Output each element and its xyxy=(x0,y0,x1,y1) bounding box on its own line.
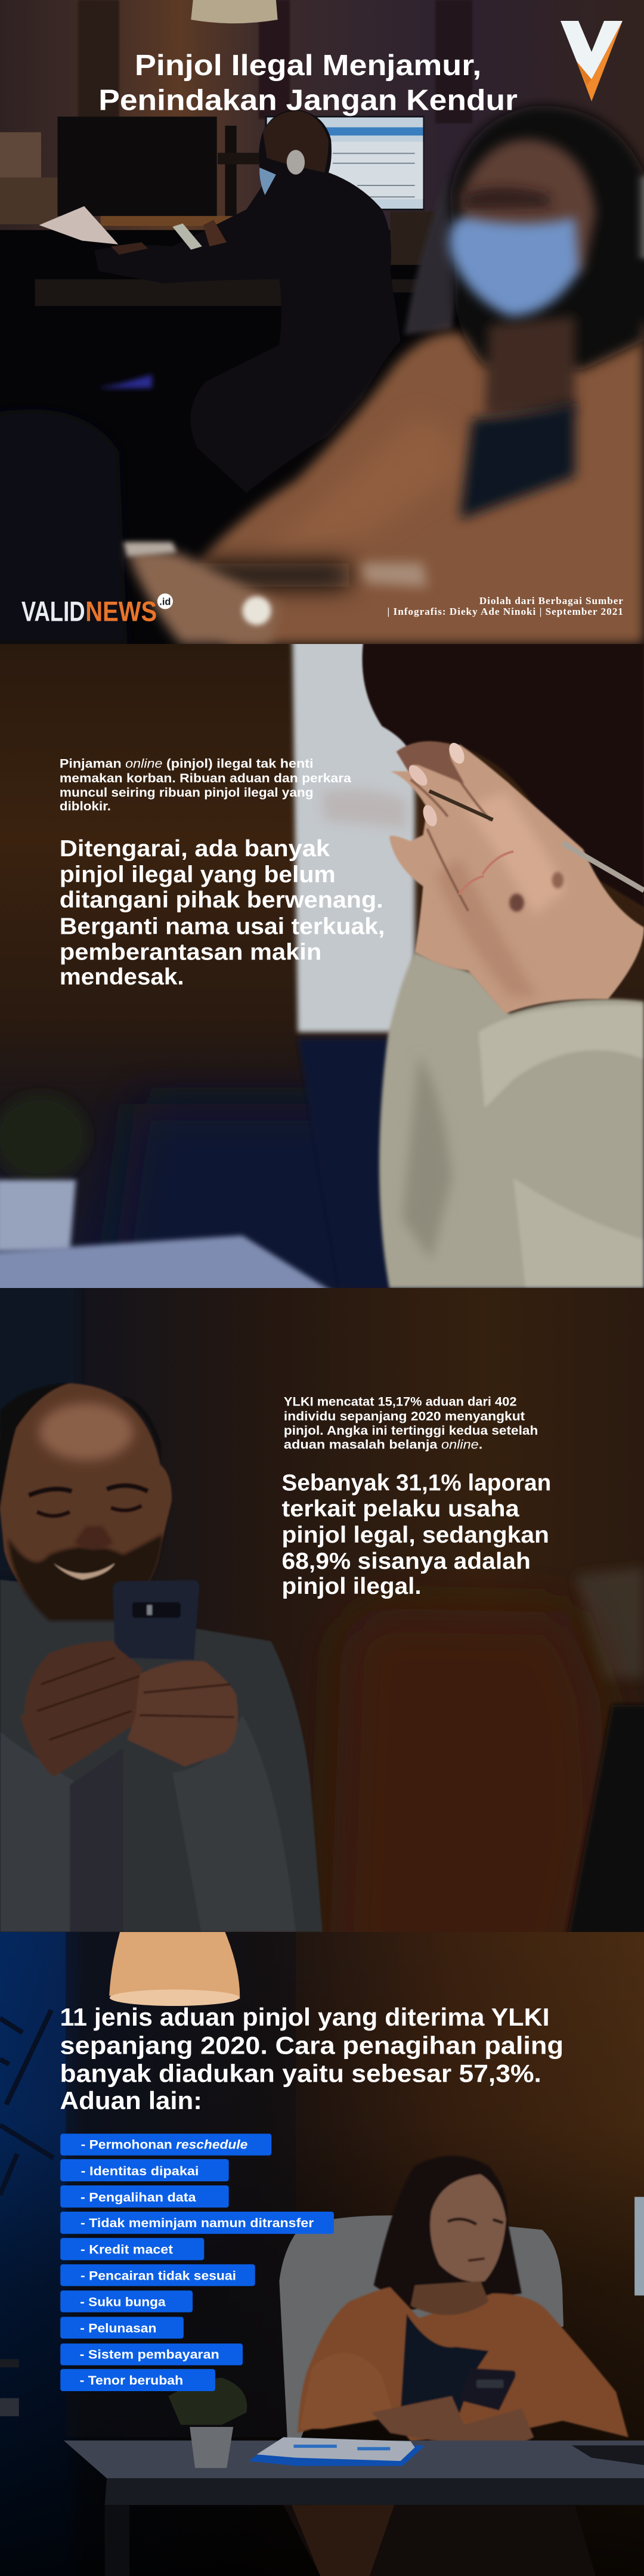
pen xyxy=(429,791,644,890)
hair side xyxy=(0,1383,70,1534)
beard xyxy=(8,1534,162,1621)
label: Kredit macet xyxy=(60,2238,204,2260)
forehead xyxy=(397,741,509,809)
YLKI text xyxy=(284,1395,538,1451)
ceiling lamp xyxy=(191,0,278,23)
desk surface glow xyxy=(101,216,256,226)
blurred shadow between hands xyxy=(193,563,349,587)
YLKI text: aduan masalah belanja online. xyxy=(284,1437,482,1451)
label: Tenor berubah xyxy=(60,2369,215,2391)
hair xyxy=(363,640,644,907)
nails xyxy=(446,741,467,766)
hair xyxy=(374,2156,522,2310)
label: Pengalihan data: - Pengalihan data xyxy=(80,2190,196,2205)
logo: Validnews.id: .id xyxy=(159,596,171,608)
blurred bright window xyxy=(292,636,415,1032)
office chair xyxy=(279,2215,564,2441)
finger creases xyxy=(411,763,491,911)
label: Identitas dipakai: - Identitas dipakai xyxy=(81,2164,199,2178)
heading: Aduan lain: xyxy=(60,2087,202,2114)
source credit xyxy=(388,595,623,617)
heading: 11 jenis aduan pinjol yang diterima YLKI xyxy=(60,2004,550,2031)
ceiling lamp xyxy=(109,1932,240,2006)
key statement xyxy=(282,1470,551,1599)
title: Pinjol Ilegal Menjamur, xyxy=(135,48,481,82)
panel: cover xyxy=(0,0,644,644)
hand xyxy=(203,219,227,246)
chair back xyxy=(404,175,464,335)
blurred orange figure xyxy=(329,1608,608,1986)
label: Identitas dipakai xyxy=(60,2159,229,2181)
title xyxy=(98,48,518,117)
shelves xyxy=(0,1932,644,2437)
blurred plant pot xyxy=(0,1180,76,1252)
sheet of paper xyxy=(39,206,118,244)
inner top xyxy=(460,402,575,519)
foreground woman xyxy=(181,106,644,644)
label: Pelunasan xyxy=(60,2317,184,2339)
logo: Validnews.id: NEWS xyxy=(85,596,157,627)
label: Pengalihan data xyxy=(60,2185,229,2207)
key statement: pinjol legal, sedangkan xyxy=(282,1522,549,1548)
YLKI text: YLKI mencatat 15,17% aduan dari 402 xyxy=(284,1395,517,1409)
list of complaint labels xyxy=(60,2134,334,2391)
intro text: muncul seiring ribuan pinjol ilegal yang xyxy=(60,785,314,800)
dark top xyxy=(401,2314,489,2413)
logo: Validnews.id: VALID xyxy=(21,596,85,627)
monitor stand xyxy=(225,126,237,241)
neck and chest xyxy=(485,316,575,415)
key statement: pemberantasan makin xyxy=(60,940,321,965)
clipboard with charts xyxy=(249,2437,425,2466)
face xyxy=(430,2174,506,2282)
nose shade xyxy=(74,1526,113,1550)
label: Tenor berubah: - Tenor berubah xyxy=(80,2373,183,2388)
label: Permohonan reschedule xyxy=(60,2134,271,2156)
neck xyxy=(411,2281,489,2315)
phone xyxy=(459,2368,516,2410)
key statement: pinjol ilegal. xyxy=(282,1574,422,1599)
key statement: Ditengarai, ada banyak xyxy=(60,836,330,862)
label: Tidak meminjam namun ditransfer xyxy=(60,2212,334,2234)
label: Permohonan reschedule: - Permohonan reschedule xyxy=(81,2138,247,2152)
blurred hands xyxy=(123,542,427,644)
jacket xyxy=(298,2287,628,2441)
key statement: terkait pelaku usaha xyxy=(282,1496,519,1522)
blue glow under the desk xyxy=(98,374,152,388)
rings xyxy=(482,852,513,874)
hair xyxy=(450,106,644,370)
logo: V mark xyxy=(561,21,623,101)
knuckle marks xyxy=(509,894,524,912)
label: Sistem pembayaran xyxy=(60,2343,243,2366)
intro text: Pinjaman online (pinjol) ilegal tak henti xyxy=(60,756,314,770)
panel: background and intro xyxy=(0,644,644,1288)
head xyxy=(0,1383,172,1617)
intro text: diblokir. xyxy=(60,799,111,813)
key statement: mendesak. xyxy=(60,964,184,990)
eyes and brows xyxy=(29,1485,148,1496)
laptop xyxy=(572,2445,644,2465)
face mask xyxy=(259,168,276,195)
label: Pencairan tidak sesuai: - Pencairan tidak sesuai xyxy=(80,2268,236,2283)
shirt xyxy=(0,1580,323,1932)
left monitor xyxy=(57,117,217,216)
blurred dark wall below window xyxy=(298,1038,411,1288)
blurred plant xyxy=(0,1094,88,1180)
man silhouette xyxy=(94,110,401,493)
wall pillars xyxy=(78,0,472,123)
key statement xyxy=(60,836,385,990)
blurred wall and window xyxy=(0,1280,644,1678)
YLKI text: individu sepanjang 2020 menyangkut xyxy=(284,1409,525,1423)
hands xyxy=(20,1641,144,1777)
jacket xyxy=(181,324,644,644)
key statement: 68,9% sisanya adalah xyxy=(282,1549,531,1574)
intro text xyxy=(60,756,351,813)
key statement: Berganti nama usai terkuak, xyxy=(60,914,385,939)
table xyxy=(64,2441,644,2576)
blurred laptop foreground xyxy=(0,410,128,644)
label: Suku bunga xyxy=(60,2290,193,2312)
boxes on the shelf xyxy=(0,132,58,224)
window frames xyxy=(0,2010,54,2195)
source credit: | Infografis: Dieky Ade Ninoki | September 2021 xyxy=(388,606,623,617)
label: Pencairan tidak sesuai xyxy=(60,2264,255,2286)
key statement: pinjol ilegal yang belum xyxy=(60,862,336,887)
dark blue lower wall xyxy=(107,1104,431,1318)
phone xyxy=(172,224,202,250)
woman xyxy=(298,2156,628,2450)
chair edge right xyxy=(630,177,644,259)
sleeve xyxy=(379,952,644,1288)
heading xyxy=(60,2004,564,2114)
potted plant xyxy=(168,2377,247,2468)
intro text: memakan korban. Ribuan aduan dan perkara xyxy=(60,771,351,785)
panel: YLKI data xyxy=(0,1288,644,1932)
surgical mask xyxy=(449,218,579,316)
face xyxy=(460,140,596,271)
key statement: ditangani pihak berwenang. xyxy=(60,887,383,913)
man xyxy=(0,1383,323,1932)
label: Sistem pembayaran: - Sistem pembayaran xyxy=(80,2348,219,2362)
title: Penindakan Jangan Kendur xyxy=(98,83,518,117)
logo: Validnews.id xyxy=(21,593,173,627)
hands xyxy=(389,741,644,1014)
YLKI text: pinjol. Angka ini tertinggi kedua setelah xyxy=(284,1423,538,1438)
hands xyxy=(371,2396,534,2450)
right monitor xyxy=(265,116,425,210)
laptop xyxy=(563,1705,644,1962)
label: Tidak meminjam namun ditransfer: - Tidak meminjam namun ditransfer xyxy=(80,2216,314,2230)
phone xyxy=(113,1580,199,1659)
heading: sepanjang 2020. Cara penagihan paling xyxy=(60,2032,564,2060)
desk xyxy=(35,279,423,306)
label: Kredit macet: - Kredit macet xyxy=(80,2242,173,2256)
source credit: Diolah dari Berbagai Sumber xyxy=(479,595,623,606)
blurred table xyxy=(0,1236,341,1297)
panel: complaint types xyxy=(0,1932,644,2576)
headset xyxy=(287,150,305,175)
heading: banyak diadukan yaitu sebesar 57,3%. xyxy=(60,2060,541,2087)
label: Suku bunga: - Suku bunga xyxy=(80,2295,166,2309)
key statement: Sebanyak 31,1% laporan xyxy=(282,1470,551,1496)
label: Pelunasan: - Pelunasan xyxy=(80,2321,156,2336)
